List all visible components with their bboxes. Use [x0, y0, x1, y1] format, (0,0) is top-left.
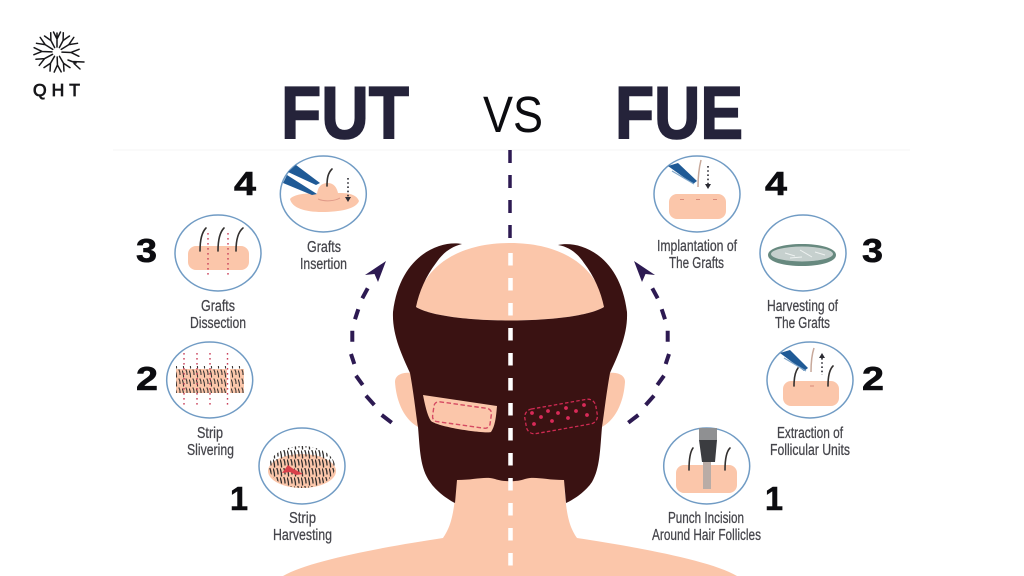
center dashed divider [508, 150, 512, 568]
FUT label: grafts dissection: Grafts [201, 298, 235, 315]
FUE step 2: extraction of follicular units [767, 342, 853, 418]
logo: QHT [33, 32, 84, 100]
FUT label: grafts insertion [300, 239, 347, 273]
FUT label: grafts dissection [190, 298, 246, 332]
FUE label: harvesting of the grafts: Harvesting of [767, 298, 839, 315]
hair [393, 243, 627, 503]
FUE label: punch incision: Punch Incision [668, 510, 744, 527]
FUE number 1: 1 [765, 480, 783, 517]
logo: QHT: QHT [33, 80, 80, 100]
title: FUT: FUT [281, 72, 409, 154]
FUE step 4: implantation of the grafts [654, 156, 740, 232]
title: VS: VS [483, 86, 543, 143]
FUT label: strip harvesting: Harvesting [273, 527, 332, 544]
FUE label: extraction of follicular units: Follicular Units [770, 442, 850, 459]
FUE number 4: 4 [765, 165, 788, 202]
left ear [395, 373, 418, 427]
bald scalp [416, 243, 604, 320]
FUT step 3: grafts dissection [175, 215, 261, 291]
FUT number 2: 2 [136, 360, 158, 397]
FUE label: harvesting of the grafts: The Grafts [775, 315, 830, 332]
FUT step 1: strip harvesting [259, 428, 345, 504]
FUT label: strip slivering: Slivering [187, 442, 234, 459]
FUT strip patch [423, 395, 497, 432]
head illustration [283, 243, 737, 576]
FUE step 3: harvesting of the grafts [760, 215, 846, 291]
FUT number 3: 3 [136, 232, 157, 269]
FUT label: grafts dissection: Dissection [190, 315, 246, 332]
FUT step 4: grafts insertion [280, 156, 366, 232]
FUT label: strip harvesting [273, 510, 332, 544]
FUT step 2: strip slivering [167, 342, 253, 418]
FUE number 2: 2 [862, 360, 884, 397]
right ear [602, 373, 625, 427]
FUT number 4: 4 [234, 165, 257, 202]
FUT label: strip harvesting: Strip [289, 510, 316, 527]
FUE label: punch incision: Around Hair Follicles [652, 527, 761, 544]
FUE label: implantation of the grafts [657, 238, 738, 272]
left dashed arrow [351, 261, 392, 423]
title: FUE: FUE [615, 72, 743, 154]
FUT label: strip slivering [187, 425, 234, 459]
FUE label: harvesting of the grafts [767, 298, 839, 332]
shoulders and neck [283, 470, 737, 576]
FUE label: implantation of the grafts: The Grafts [669, 255, 724, 272]
FUE step 1: punch incision [664, 428, 750, 504]
FUE label: implantation of the grafts: Implantation of [657, 238, 738, 255]
FUE label: punch incision [652, 510, 761, 544]
FUE label: extraction of follicular units [770, 425, 850, 459]
FUT label: grafts insertion: Grafts [307, 239, 341, 256]
FUE label: extraction of follicular units: Extraction of [777, 425, 844, 442]
FUE number 3: 3 [862, 232, 883, 269]
FUT number 1: 1 [230, 480, 248, 517]
right dashed arrow [628, 261, 669, 423]
FUE dotted patch [523, 398, 599, 435]
FUT label: grafts insertion: Insertion [300, 256, 347, 273]
FUT label: strip slivering: Strip [197, 425, 223, 442]
